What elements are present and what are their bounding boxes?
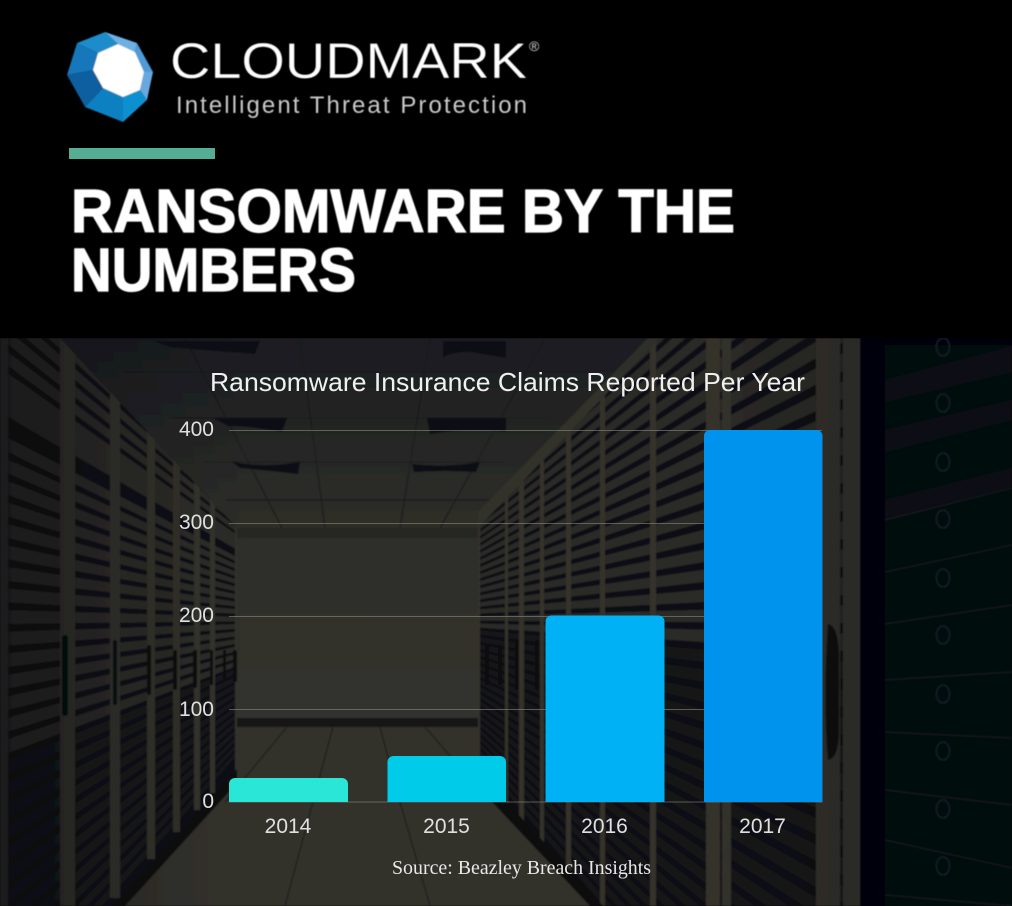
y axis labels: 200: [179, 604, 214, 627]
bar chart: ransomware insurance claims: [179, 367, 822, 838]
icon: blue gem: [67, 32, 153, 122]
title: [71, 177, 735, 304]
x axis labels: 2015: [423, 815, 470, 838]
bar: 2014: [229, 778, 348, 802]
header: black background: [0, 0, 1012, 338]
wordmark: CLOUDMARK: [170, 33, 527, 89]
bar: 2015: [388, 756, 506, 802]
accent bar: [69, 148, 215, 159]
x axis labels: 2014: [265, 815, 312, 838]
chart title: Ransomware Insurance Claims Reported Per Year: [210, 367, 805, 397]
y axis labels: 400: [179, 418, 214, 441]
y axis labels: [179, 418, 214, 813]
bar: 2017: [704, 430, 822, 802]
y axis labels: 0: [202, 790, 214, 813]
source note: Source: Beazley Breach Insights: [392, 857, 651, 879]
x axis labels: 2017: [739, 815, 786, 838]
title: RANSOMWARE BY THE: [71, 177, 735, 245]
y axis labels: 100: [179, 698, 214, 721]
x axis labels: 2016: [581, 815, 628, 838]
x axis labels: [265, 815, 786, 838]
y axis labels: 300: [179, 511, 214, 534]
title: NUMBERS: [71, 236, 356, 304]
logo: Cloudmark gem and wordmark: [67, 32, 540, 122]
bar: 2016: [546, 616, 664, 802]
tagline: Intelligent Threat Protection: [176, 92, 527, 119]
background photo: server room aisle: [0, 338, 1012, 906]
registered mark: ®: [529, 38, 540, 54]
